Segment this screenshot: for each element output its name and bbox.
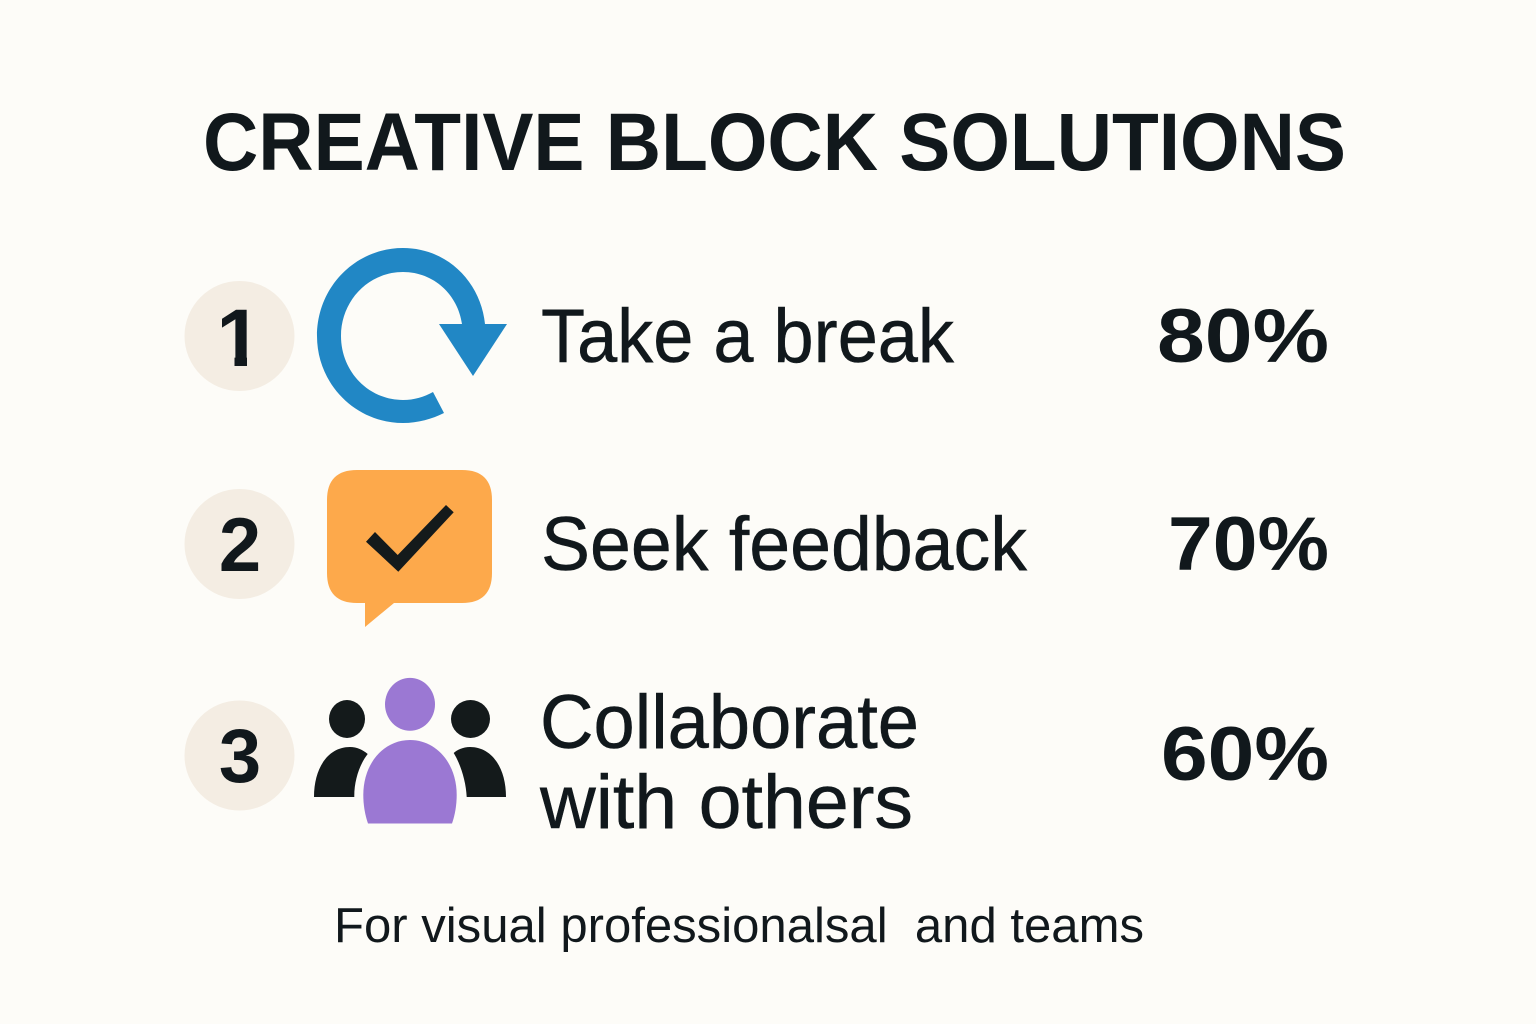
row 2: seek feedback bbox=[184, 470, 1329, 627]
number badge 1: 1 bbox=[216, 293, 262, 384]
row 1: take a break bbox=[184, 248, 1329, 423]
footer caption: For visual professionalsal and teams bbox=[334, 899, 1144, 953]
number badge 1 bbox=[184, 281, 294, 391]
value: 60%: 60% bbox=[1161, 712, 1329, 797]
number badge 2: 2 bbox=[219, 503, 261, 588]
icon: group of people bbox=[314, 678, 506, 824]
number badge 3: 3 bbox=[219, 714, 261, 799]
icon: speech bubble with check bbox=[327, 470, 492, 627]
label: collaborate with others bbox=[539, 680, 919, 845]
label: collaborate with others: Collaborate bbox=[540, 680, 919, 765]
title: CREATIVE BLOCK SOLUTIONS bbox=[203, 97, 1346, 188]
value: 80%: 80% bbox=[1157, 294, 1329, 379]
icon: circular arrow bbox=[317, 248, 507, 423]
label: take a break: Take a break bbox=[541, 294, 955, 379]
label: collaborate with others: with others bbox=[539, 760, 913, 845]
value: 70%: 70% bbox=[1168, 502, 1329, 587]
number badge 2 bbox=[184, 489, 294, 599]
row 3: collaborate with others bbox=[184, 678, 1329, 845]
label: seek feedback: Seek feedback bbox=[541, 502, 1028, 587]
number badge 3 bbox=[184, 700, 294, 810]
